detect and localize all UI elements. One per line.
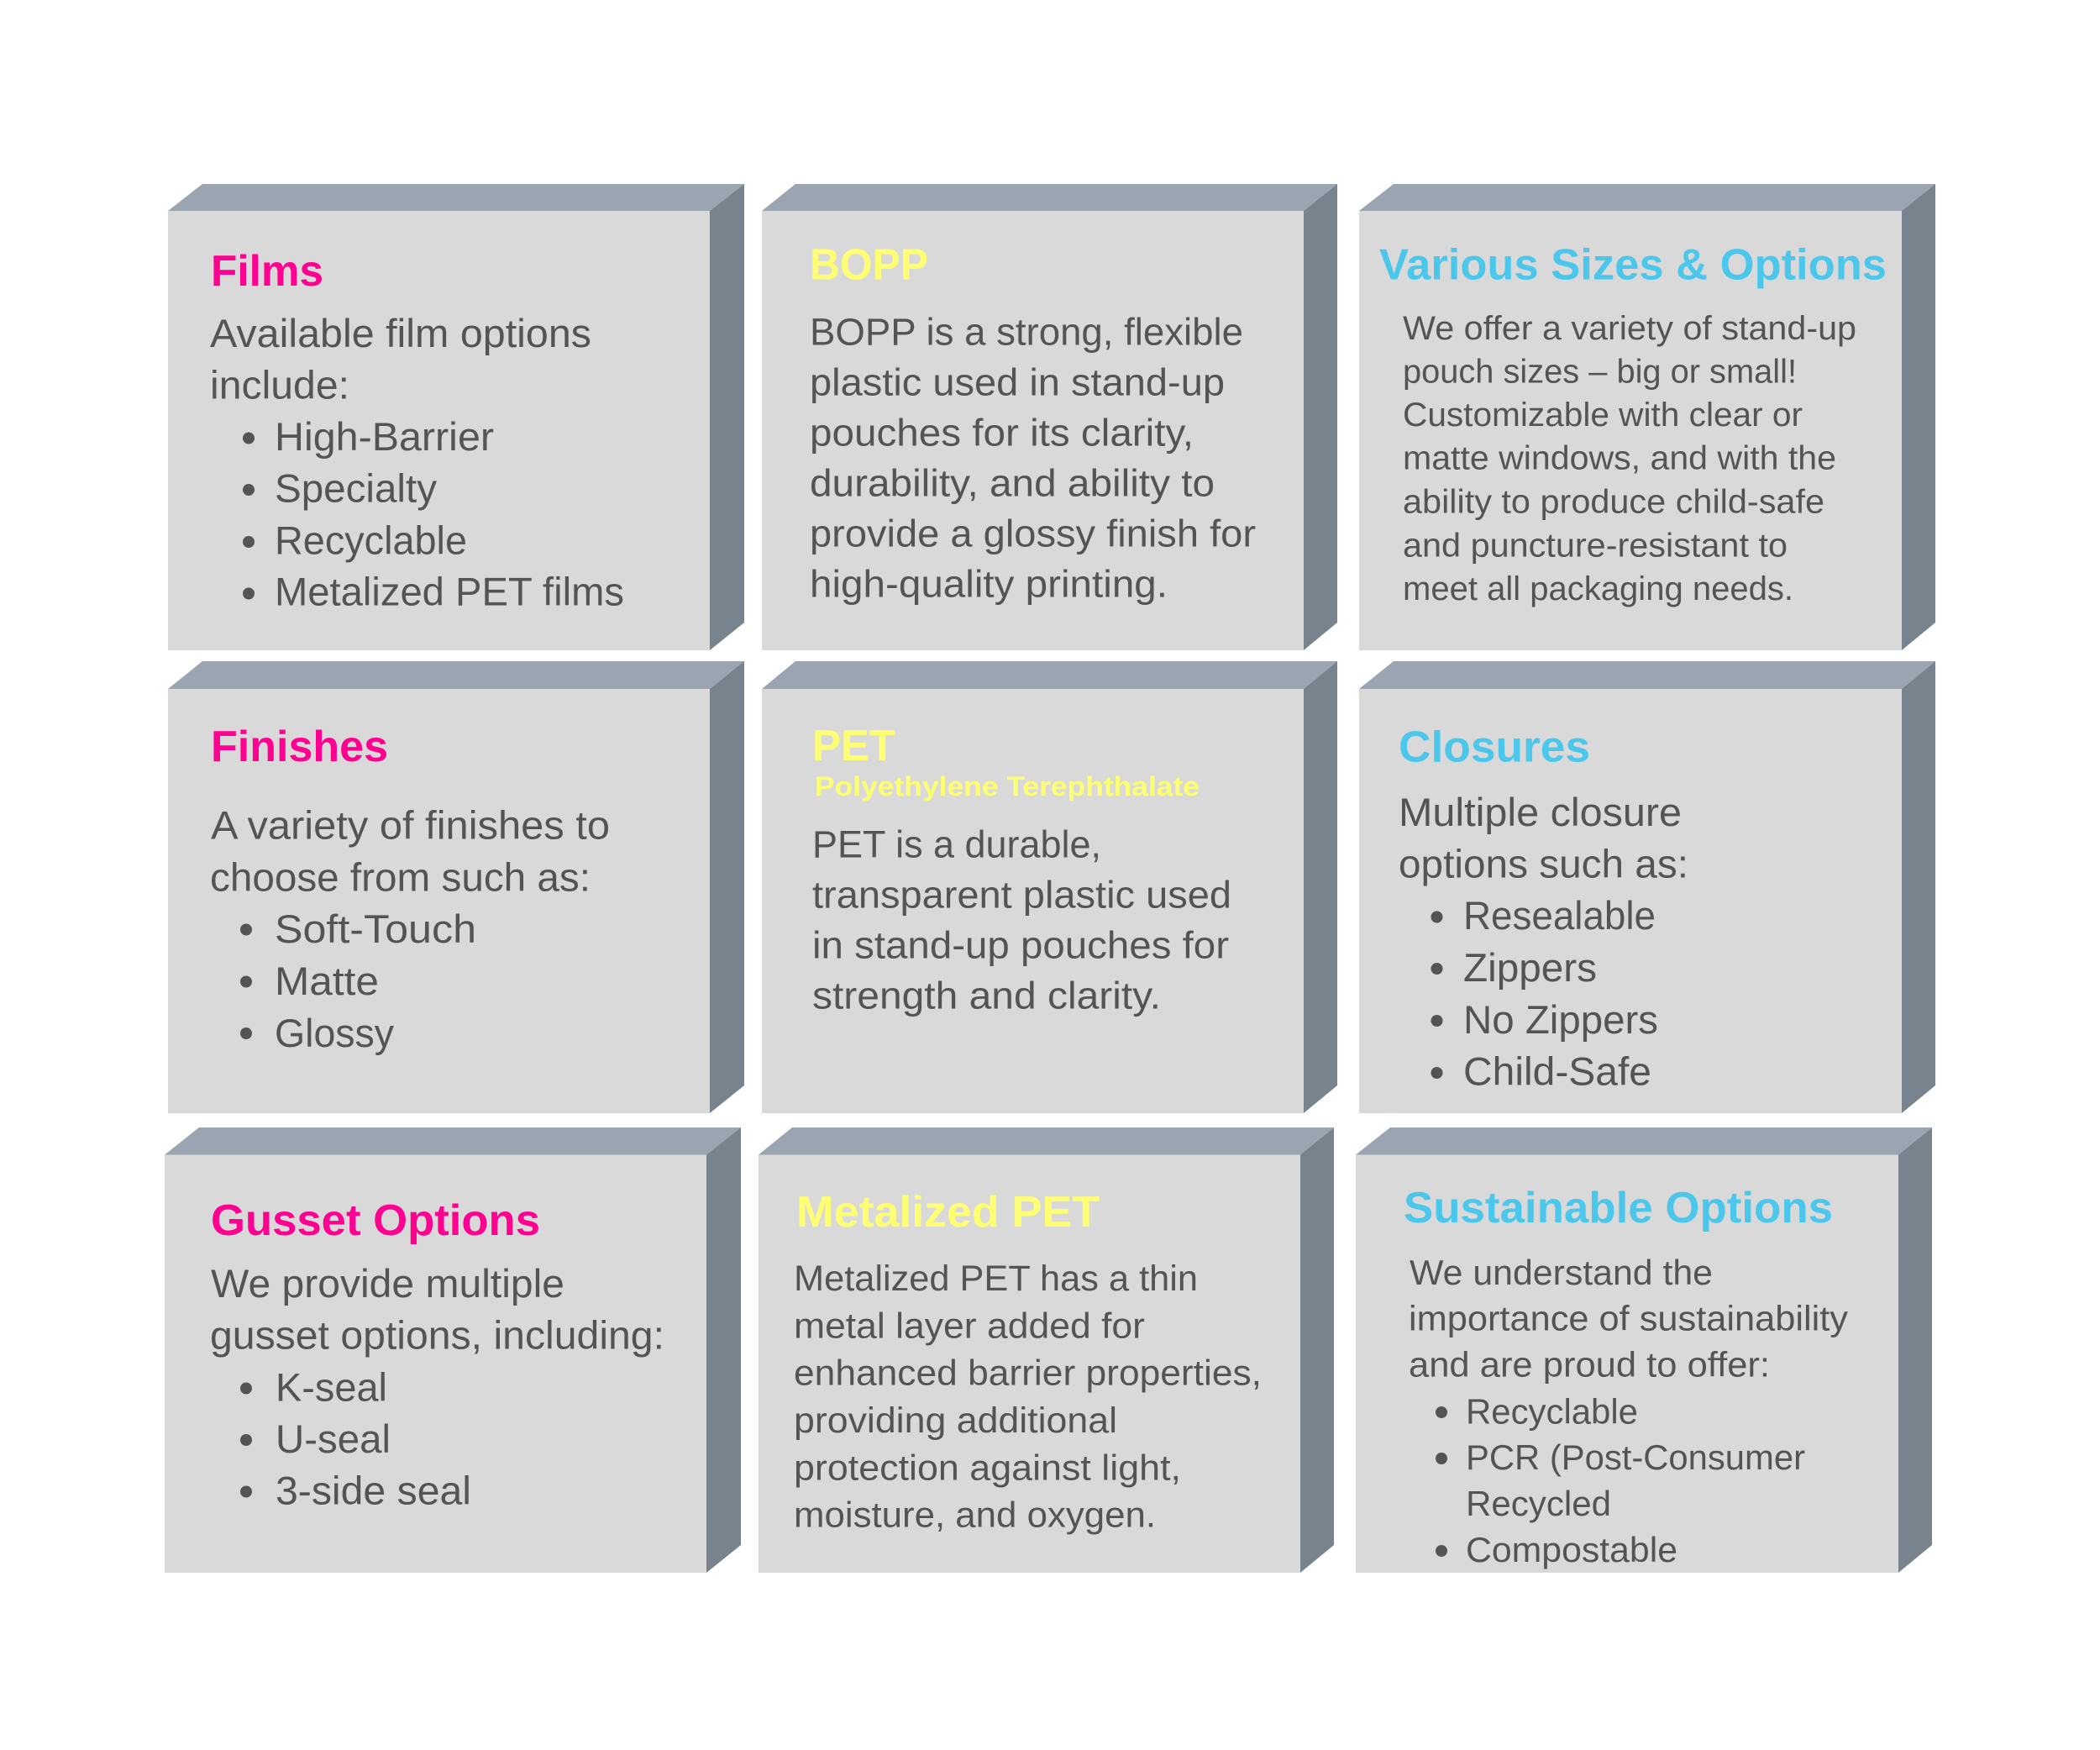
intro text: options such as: — [1399, 842, 1688, 886]
panel: Gusset Options — [165, 1127, 741, 1573]
3D box — [1359, 184, 1935, 650]
intro text: and are proud to offer: — [1409, 1344, 1770, 1385]
bullet list: Recycled — [1466, 1484, 1611, 1523]
heading: BOPP: BOPP — [810, 240, 928, 289]
bullet list — [243, 414, 624, 613]
bullet list: Matte — [275, 959, 379, 1003]
body text: high-quality printing. — [810, 563, 1168, 605]
bullet list: Glossy — [275, 1011, 394, 1055]
intro text — [210, 1261, 664, 1358]
heading: Finishes: Finishes — [211, 723, 388, 771]
bullet list — [1436, 1391, 1805, 1569]
bullet list: PCR (Post-Consumer — [1466, 1437, 1805, 1477]
panel: Metalized PET — [759, 1127, 1334, 1573]
3D box — [168, 661, 744, 1113]
panel: Finishes — [168, 661, 744, 1113]
body text: ability to produce child-safe — [1403, 483, 1824, 520]
body text: pouches for its clarity, — [810, 412, 1194, 454]
heading: Various Sizes & Options: Various Sizes & Options — [1379, 240, 1887, 289]
body text — [794, 1259, 1262, 1536]
bullet list: No Zippers — [1463, 997, 1658, 1042]
body text: provide a glossy finish for — [810, 512, 1256, 554]
bullet list: Recyclable — [275, 518, 467, 563]
intro text: A variety of finishes to — [211, 803, 610, 847]
bullet list: Resealable — [1463, 893, 1656, 938]
3D box — [1356, 1127, 1932, 1573]
body text: providing additional — [794, 1401, 1117, 1441]
body text: meet all packaging needs. — [1403, 570, 1793, 607]
intro text: Available film options — [210, 311, 591, 355]
3D box — [168, 184, 744, 650]
body text: moisture, and oxygen. — [794, 1495, 1156, 1536]
body text: enhanced barrier properties, — [794, 1353, 1262, 1393]
bullet list: Zippers — [1463, 945, 1597, 990]
body text: Metalized PET has a thin — [794, 1259, 1198, 1299]
body text — [810, 311, 1256, 605]
body text: strength and clarity. — [812, 975, 1161, 1017]
body text — [812, 823, 1231, 1017]
intro text — [1399, 790, 1688, 886]
3D box — [165, 1127, 741, 1573]
intro text: We provide multiple — [211, 1261, 564, 1306]
bullet list — [1431, 893, 1658, 1094]
bullet list: K-seal — [276, 1364, 387, 1410]
bullet list: High-Barrier — [275, 414, 494, 459]
body text: metal layer added for — [794, 1306, 1145, 1346]
bullet list — [240, 907, 476, 1055]
3D box — [762, 184, 1337, 650]
panel: PET — [762, 661, 1337, 1113]
body text: transparent plastic used — [812, 874, 1231, 916]
heading: Closures: Closures — [1399, 723, 1590, 771]
intro text — [1409, 1253, 1848, 1385]
heading: Films: Films — [211, 247, 323, 296]
body text: plastic used in stand-up — [810, 361, 1225, 403]
body text — [1403, 310, 1856, 607]
bullet list: Compostable — [1466, 1530, 1677, 1569]
panel: Closures — [1359, 661, 1935, 1113]
body text: PET is a durable, — [812, 823, 1101, 865]
heading: Metalized PET: Metalized PET — [796, 1188, 1100, 1237]
intro text: importance of sustainability — [1409, 1299, 1848, 1337]
body text: and puncture-resistant to — [1403, 527, 1788, 564]
panel: Various Sizes & Options — [1359, 184, 1935, 650]
intro text — [210, 311, 591, 407]
intro text — [210, 803, 610, 899]
intro text: We understand the — [1410, 1253, 1713, 1292]
bullet list: U-seal — [276, 1416, 391, 1461]
bullet list: Metalized PET films — [275, 570, 624, 613]
panel: Sustainable Options — [1356, 1127, 1932, 1573]
intro text: Multiple closure — [1399, 790, 1682, 834]
panel: BOPP — [762, 184, 1337, 650]
body text: We offer a variety of stand-up — [1403, 310, 1856, 347]
body text: Customizable with clear or — [1403, 397, 1803, 434]
bullet list: Recyclable — [1466, 1391, 1638, 1432]
intro text: include: — [210, 363, 349, 407]
3D box — [1359, 661, 1935, 1113]
heading: Sustainable Options: Sustainable Options — [1404, 1184, 1833, 1232]
intro text: gusset options, including: — [210, 1312, 664, 1358]
bullet list: 3-side seal — [276, 1469, 471, 1512]
heading: Gusset Options: Gusset Options — [211, 1196, 540, 1245]
body text: matte windows, and with the — [1403, 440, 1836, 477]
3D box — [762, 661, 1337, 1113]
body text: BOPP is a strong, flexible — [810, 311, 1243, 353]
body text: protection against light, — [794, 1448, 1181, 1489]
body text: pouch sizes – big or small! — [1403, 354, 1797, 391]
bullet list: Soft-Touch — [275, 907, 476, 951]
body text: in stand-up pouches for — [812, 924, 1229, 966]
bullet list: Specialty — [275, 465, 437, 511]
bullet list: Child-Safe — [1463, 1048, 1651, 1094]
bullet list — [240, 1364, 471, 1512]
heading: PET: PET — [812, 722, 895, 770]
panel: Films — [168, 184, 744, 650]
subheading: Polyethylene Terephthalate: Polyethylene Terephthalate — [815, 771, 1200, 801]
intro text: choose from such as: — [210, 855, 591, 899]
3D box — [759, 1127, 1334, 1573]
body text: durability, and ability to — [810, 462, 1215, 504]
